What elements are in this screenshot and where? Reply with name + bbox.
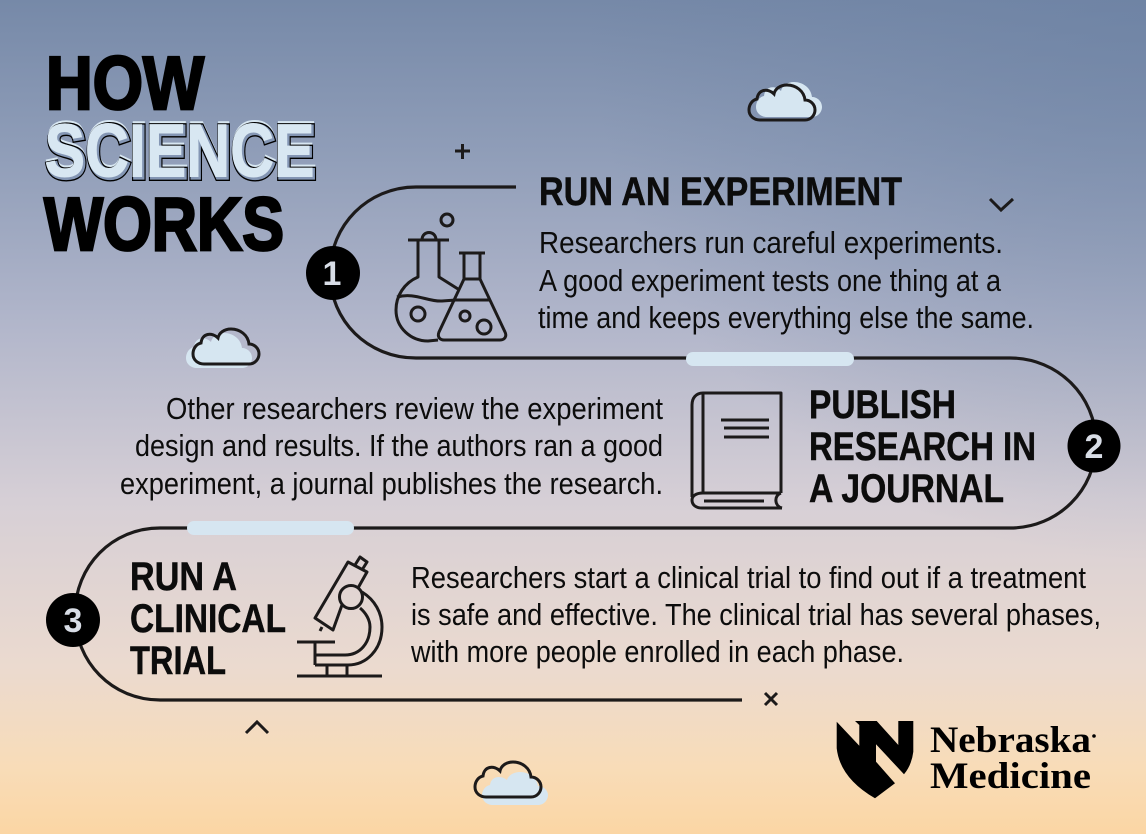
heading: RUN A	[130, 555, 237, 599]
body text: time and keeps everything else the same.	[538, 300, 1034, 335]
number badge 2	[1068, 420, 1120, 472]
body text	[538, 225, 1034, 335]
title: SCIENCE	[46, 110, 316, 194]
panel: step 2 publish research	[120, 383, 1120, 511]
highlight bar: top of step 3	[187, 521, 354, 535]
heading: TRIAL	[130, 639, 226, 683]
title: WORKS	[44, 182, 284, 266]
heading	[809, 383, 1036, 511]
heading: A JOURNAL	[809, 467, 1004, 511]
icon: cloud middle left	[186, 329, 259, 368]
body text	[410, 560, 1101, 669]
body text: Researchers run careful experiments.	[539, 225, 1003, 260]
heading: CLINICAL	[130, 597, 286, 641]
wordmark: Nebraska	[930, 720, 1091, 761]
title: SCIENCE	[44, 108, 314, 192]
icon: cloud top right	[749, 82, 822, 120]
icon: microscope	[297, 557, 382, 676]
logo: Nebraska Medicine	[837, 720, 1096, 798]
icon: book	[692, 393, 782, 508]
title: SCIENCE	[46, 107, 316, 191]
number badge 1: 1	[323, 255, 341, 293]
heading: RUN AN EXPERIMENT	[539, 170, 902, 214]
title: HOW	[46, 41, 204, 125]
number badge 1	[306, 246, 360, 300]
number badge 2: 2	[1085, 428, 1103, 466]
panel: step 3 clinical trial	[46, 555, 1101, 683]
winding path line	[75, 187, 1096, 700]
panel: step 1 run an experiment	[306, 170, 1034, 341]
title	[44, 41, 316, 266]
title: SCIENCE	[46, 110, 316, 194]
number badge 3	[46, 593, 100, 647]
wordmark: Medicine	[930, 756, 1091, 797]
body text: A good experiment tests one thing at a	[539, 263, 1002, 298]
icon: cloud bottom	[475, 762, 548, 805]
icon: shield N	[837, 721, 913, 798]
body text: Other researchers review the experiment	[166, 391, 663, 426]
body text: experiment, a journal publishes the research.	[120, 466, 663, 501]
icon: chevron down	[990, 199, 1013, 210]
number badge 3: 3	[64, 602, 82, 640]
body text	[120, 391, 663, 501]
heading: PUBLISH	[809, 383, 956, 427]
highlight bar: top of step 2	[686, 352, 854, 366]
heading: RESEARCH IN	[809, 425, 1036, 469]
icon: chevron up	[246, 722, 268, 733]
icon: plus mark	[455, 144, 470, 159]
heading	[130, 555, 286, 683]
body text: design and results. If the authors ran a good	[135, 428, 663, 463]
icon: cross mark	[765, 693, 777, 705]
icon: flasks	[396, 214, 506, 341]
wordmark	[930, 720, 1096, 797]
body text: with more people enrolled in each phase.	[410, 634, 904, 669]
